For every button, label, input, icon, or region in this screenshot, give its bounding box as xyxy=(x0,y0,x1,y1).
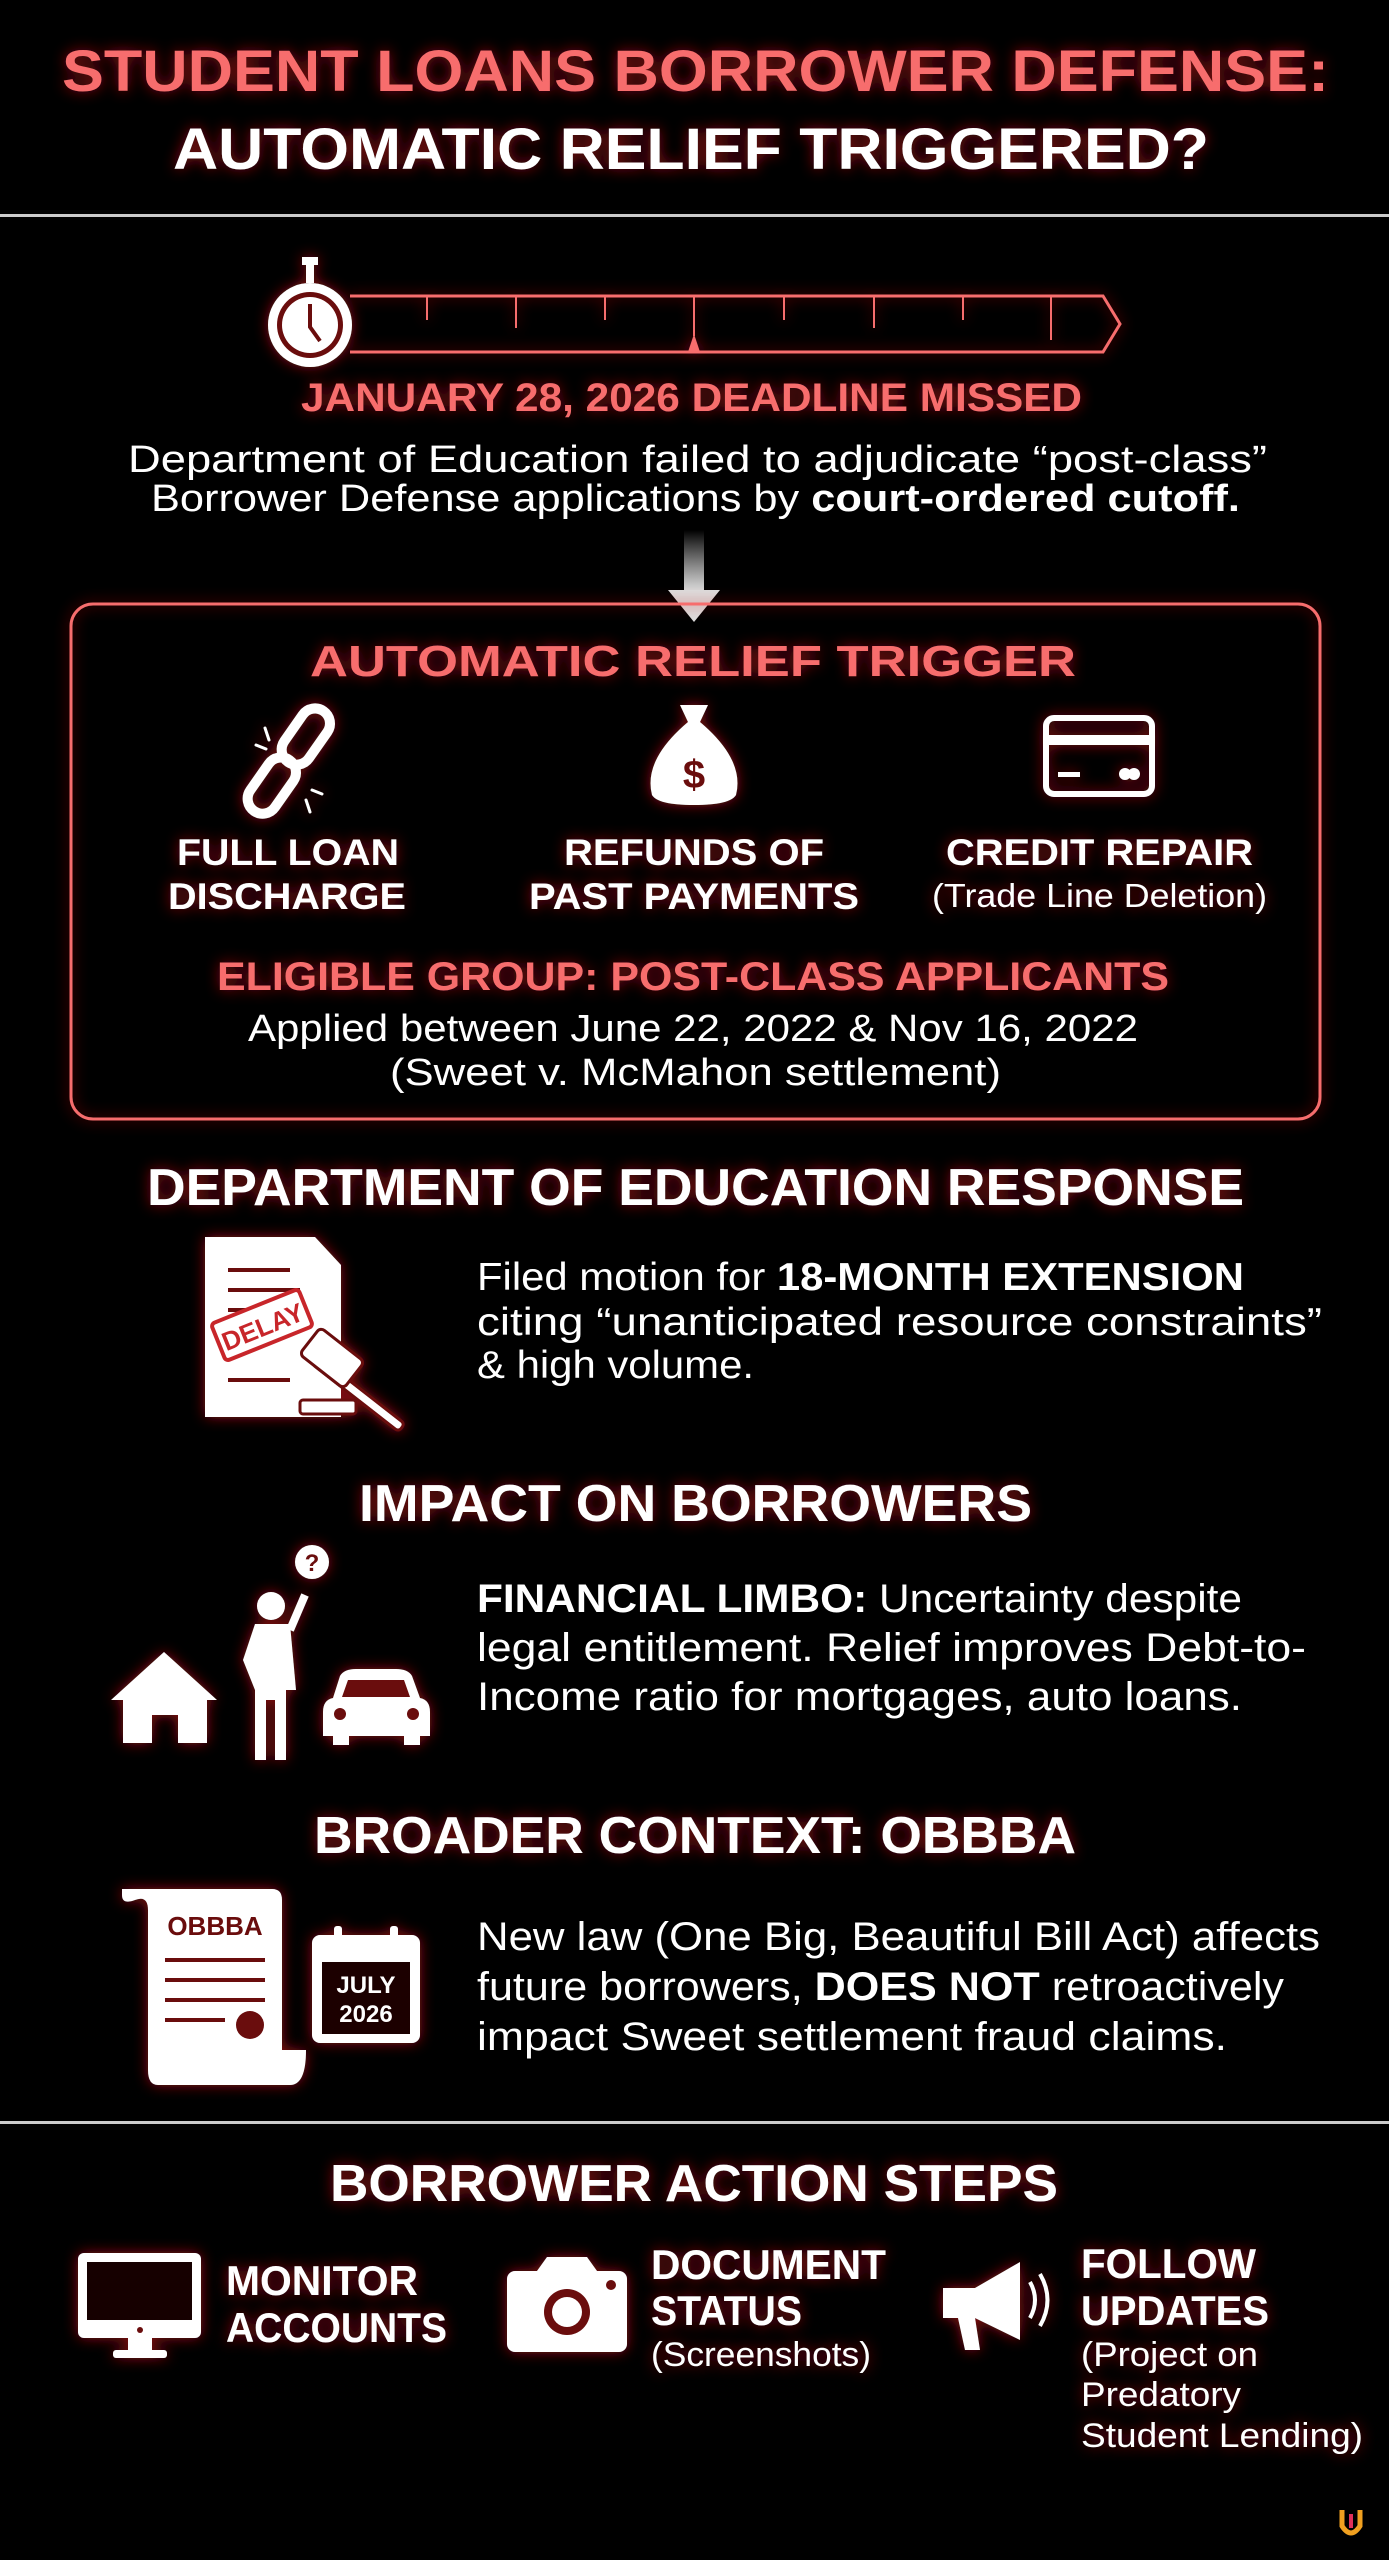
obbba text: impact Sweet settlement fraud claims. xyxy=(477,2015,1227,2059)
step: follow updates xyxy=(943,2240,1363,2455)
deadline heading: JANUARY 28, 2026 DEADLINE MISSED xyxy=(301,376,1082,420)
label: full loan discharge: FULL LOAN xyxy=(177,832,399,873)
title: AUTOMATIC RELIEF TRIGGERED? xyxy=(173,117,1209,182)
heading: borrower action steps: BORROWER ACTION STEPS xyxy=(330,2155,1058,2213)
icon: person with house and car xyxy=(111,1545,430,1760)
impact text: FINANCIAL LIMBO: Uncertainty despite xyxy=(477,1577,1242,1621)
step: document status: DOCUMENT xyxy=(651,2241,886,2288)
icon: credit card xyxy=(1046,718,1152,794)
label: full loan discharge xyxy=(168,832,406,917)
icon: money bag xyxy=(650,705,738,805)
step: monitor accounts xyxy=(78,2253,447,2358)
logo xyxy=(1342,2510,1360,2533)
obbba text: New law (One Big, Beautiful Bill Act) affects xyxy=(477,1915,1320,1959)
response text: Filed motion for 18-MONTH EXTENSION xyxy=(477,1256,1244,1299)
response text: citing “unanticipated resource constraints” xyxy=(477,1301,1322,1344)
step: follow updates: UPDATES xyxy=(1081,2287,1269,2334)
eligible group text: (Sweet v. McMahon settlement) xyxy=(390,1052,1001,1094)
icon: money bag: $ xyxy=(683,753,705,797)
label: refunds: REFUNDS OF xyxy=(564,832,824,873)
title xyxy=(62,39,1329,182)
step: document status xyxy=(507,2241,886,2374)
eligible group text xyxy=(248,1008,1138,1094)
eligible group heading: ELIGIBLE GROUP: POST-CLASS APPLICANTS xyxy=(217,955,1169,999)
icon: person with house and car: ? xyxy=(305,1550,319,1577)
label: full loan discharge: DISCHARGE xyxy=(168,876,406,917)
obbba text xyxy=(477,1915,1320,2059)
step: follow updates: FOLLOW xyxy=(1081,2240,1256,2287)
panel: automatic relief trigger xyxy=(71,604,1320,1119)
label: credit repair xyxy=(932,832,1267,914)
step: follow updates: Predatory xyxy=(1081,2376,1241,2414)
arrow xyxy=(668,530,720,622)
deadline text: Borrower Defense applications by court-ordered cutoff. xyxy=(151,478,1240,520)
deadline text xyxy=(128,439,1267,520)
response text: & high volume. xyxy=(477,1344,754,1387)
icon: delay document with gavel xyxy=(205,1237,405,1432)
response text xyxy=(477,1256,1322,1387)
icon: stopwatch xyxy=(268,257,352,367)
panel heading: AUTOMATIC RELIEF TRIGGER xyxy=(310,637,1076,686)
icon: broken chain xyxy=(242,703,336,820)
label: credit repair: (Trade Line Deletion) xyxy=(932,877,1267,914)
impact text: Income ratio for mortgages, auto loans. xyxy=(477,1675,1242,1719)
step: monitor accounts: ACCOUNTS xyxy=(226,2304,447,2351)
label: refunds: PAST PAYMENTS xyxy=(529,876,859,917)
title: STUDENT LOANS BORROWER DEFENSE: xyxy=(62,39,1329,104)
timeline with stopwatch xyxy=(268,257,1120,367)
step: monitor accounts: MONITOR xyxy=(226,2257,418,2304)
step: document status: (Screenshots) xyxy=(651,2336,871,2374)
icon: OBBBA scroll and calendar: 2026 xyxy=(339,2001,393,2028)
icon: delay document with gavel: DELAY xyxy=(217,1297,308,1357)
label: refunds xyxy=(529,832,859,917)
step: follow updates: Student Lending) xyxy=(1081,2417,1363,2455)
step: document status: STATUS xyxy=(651,2287,802,2334)
heading: department response: DEPARTMENT OF EDUCATION RESPONSE xyxy=(147,1159,1244,1217)
obbba text: future borrowers, DOES NOT retroactively xyxy=(477,1965,1284,2009)
icon: OBBBA scroll and calendar: OBBBA xyxy=(167,1911,263,1941)
heading: impact on borrowers: IMPACT ON BORROWERS xyxy=(359,1475,1032,1533)
impact text: legal entitlement. Relief improves Debt-to- xyxy=(477,1626,1306,1670)
label: credit repair: CREDIT REPAIR xyxy=(946,832,1253,873)
step: follow updates: (Project on xyxy=(1081,2336,1258,2374)
icon: OBBBA scroll and calendar: JULY xyxy=(336,1972,396,1999)
deadline text: Department of Education failed to adjudicate “post-class” xyxy=(128,439,1267,481)
heading: broader context: BROADER CONTEXT: OBBBA xyxy=(314,1807,1076,1865)
icon: OBBBA scroll and calendar xyxy=(122,1889,420,2085)
eligible group text: Applied between June 22, 2022 & Nov 16, 2022 xyxy=(248,1008,1138,1050)
impact text xyxy=(477,1577,1306,1719)
